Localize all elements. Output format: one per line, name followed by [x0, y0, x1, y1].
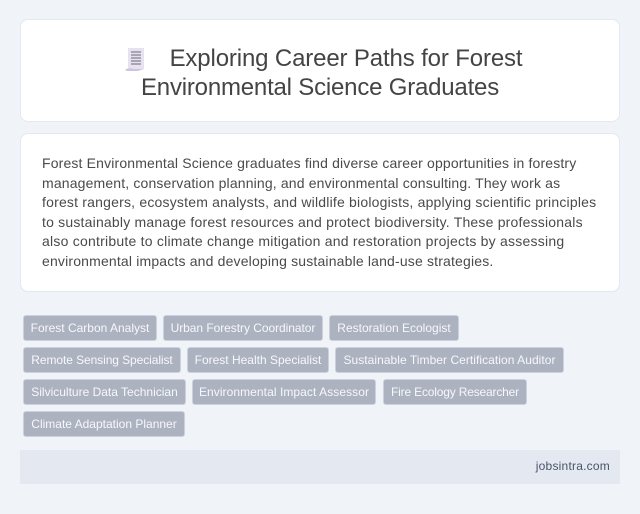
- career tags: [23, 315, 564, 437]
- tag: [23, 347, 181, 373]
- tag: Silviculture Data Technician: [31, 385, 178, 399]
- description text: forest rangers, ecosystem analysts, and wildlife biologists, applying scientific principles: [42, 194, 596, 210]
- tag: [335, 347, 564, 373]
- tag: Fire Ecology Researcher: [391, 385, 519, 399]
- footer source text: jobsintra.com: [536, 459, 610, 473]
- tag: [192, 379, 376, 405]
- tag: [23, 315, 157, 341]
- tag: [187, 347, 329, 373]
- icon: document scroll: [125, 48, 144, 71]
- tag: [163, 315, 323, 341]
- title: Environmental Science Graduates: [141, 74, 499, 101]
- description text: to sustainably manage forest resources and protect biodiversity. These professionals: [42, 214, 583, 230]
- tag: [383, 379, 527, 405]
- panel: description: [20, 133, 620, 292]
- panel: title header: [20, 19, 620, 122]
- description text: environmental impacts and developing sustainable land-use strategies.: [42, 252, 493, 268]
- tag: Remote Sensing Specialist: [31, 353, 173, 367]
- tag: Forest Carbon Analyst: [31, 321, 149, 335]
- tag: Environmental Impact Assessor: [199, 385, 369, 399]
- tag: [23, 411, 185, 437]
- tag: Urban Forestry Coordinator: [171, 321, 315, 335]
- title: Exploring Career Paths for Forest: [170, 45, 522, 72]
- description text: management, conservation planning, and environmental consulting. They work as: [42, 174, 560, 190]
- tag: [329, 315, 459, 341]
- description text: [42, 155, 596, 269]
- footer bar: [20, 450, 620, 484]
- tag: Forest Health Specialist: [195, 353, 321, 367]
- tag: Restoration Ecologist: [337, 321, 451, 335]
- tag: Sustainable Timber Certification Auditor: [343, 353, 556, 367]
- tag: [23, 379, 186, 405]
- description text: also contribute to climate change mitigation and restoration projects by assessing: [42, 233, 564, 249]
- description text: Forest Environmental Science graduates find diverse career opportunities in forestry: [42, 155, 576, 171]
- tag: Climate Adaptation Planner: [31, 417, 177, 431]
- title: [141, 45, 522, 101]
